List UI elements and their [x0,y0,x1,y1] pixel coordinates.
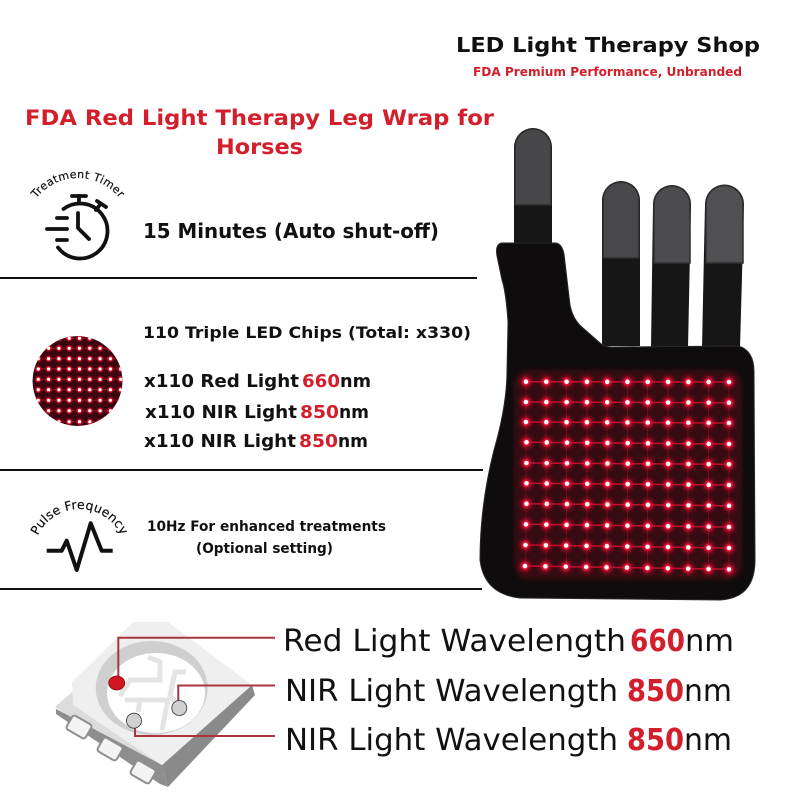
wavelength: NIR 2: NIR Light Wavelength [285,723,618,758]
icon: LED circle [32,336,122,426]
wavelength: red: 660 [630,624,685,659]
wrap body [480,243,755,600]
product: leg wrap [480,128,755,600]
NIR line 2: nm [338,432,368,452]
red light line: 660 [302,372,340,392]
wavelength: NIR 1: 850 [627,674,684,709]
brand heading [456,33,760,79]
NIR line 2: x110 NIR Light [144,432,296,452]
chip body [55,622,255,787]
red light line [144,372,371,392]
connector lines [118,638,275,736]
NIR line 1: x110 NIR Light [145,403,297,423]
icon: stopwatch with curved label [30,170,124,260]
wavelength: red: Red Light Wavelength [283,624,626,659]
chip total: 110 Triple LED Chips (Total: x330) [143,323,471,342]
icon: pulse wave with curved label: Pulse Frequency [30,500,128,535]
red light line: nm [340,372,371,392]
NIR line 1: nm [339,403,369,423]
wavelength: NIR 2: nm [684,723,732,758]
brand heading: FDA Premium Performance, Unbranded [473,65,742,79]
LED dots [109,676,187,728]
wavelength: NIR 1: NIR Light Wavelength [285,674,618,709]
title [25,106,495,159]
panel: treatment timer [30,170,439,260]
panel: LED chips [32,323,471,452]
diagram: LED chip [55,622,275,787]
NIR line 1: 850 [300,403,339,423]
wavelength: NIR 1: nm [684,674,732,709]
icon: stopwatch with curved label: Treatment Timer [30,170,124,196]
wavelength: NIR 2: 850 [627,723,684,758]
title: FDA Red Light Therapy Leg Wrap for [25,106,495,130]
icon: pulse wave with curved label [30,500,128,572]
brand heading: LED Light Therapy Shop [456,33,760,57]
LED grid [514,370,742,580]
title: Horses [216,135,303,159]
wavelength: red: nm [685,624,734,659]
NIR line 1 [145,403,369,423]
straps [514,128,744,348]
NIR line 2 [144,432,368,452]
pulse text: (Optional setting) [196,541,333,557]
timer text: 15 Minutes (Auto shut-off) [143,219,439,243]
NIR line 2: 850 [299,432,338,452]
panel: pulse frequency [30,500,386,572]
wavelength labels [283,624,734,758]
pulse text: 10Hz For enhanced treatments [147,519,386,535]
red light line: x110 Red Light [144,372,299,392]
pulse text [147,519,386,557]
